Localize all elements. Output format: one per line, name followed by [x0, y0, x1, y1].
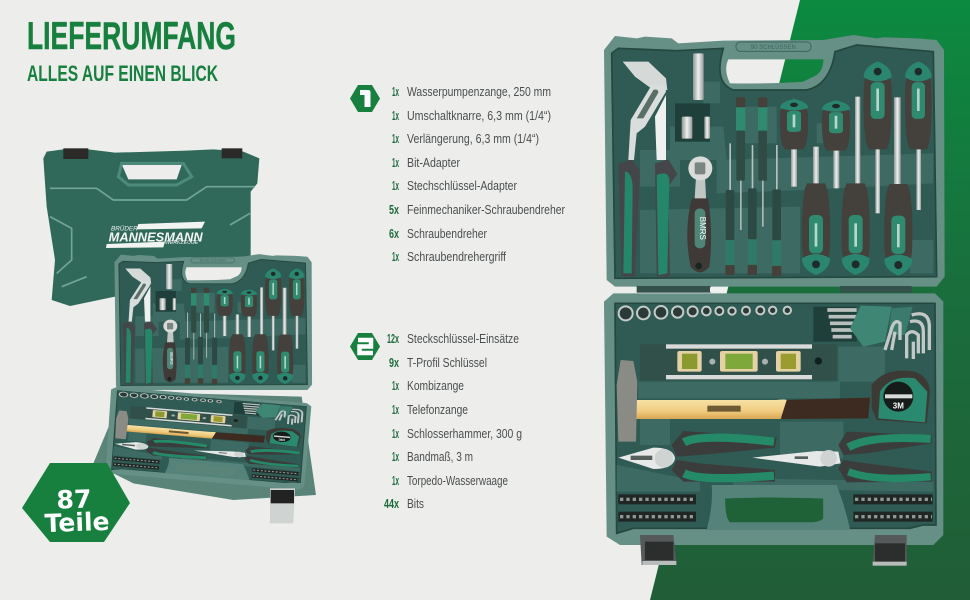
item row [392, 402, 468, 417]
item row: Steckschlüssel-Einsätze [407, 332, 519, 346]
item row: 1x [392, 131, 399, 146]
item row [392, 378, 464, 393]
item row [392, 473, 508, 488]
item row: Umschaltknarre, 6,3 mm (1/4“) [407, 109, 551, 123]
badge: 87 Teile [22, 463, 130, 542]
parts list 2 [350, 331, 522, 511]
parts list 1 [350, 84, 565, 264]
badge 1 [350, 85, 380, 112]
badge: 87 Teile: 87 [56, 484, 92, 515]
item row: Kombizange [407, 379, 464, 393]
item row: 12x [387, 331, 399, 346]
hammer [617, 360, 870, 442]
item row [387, 331, 519, 346]
label plate [736, 42, 811, 51]
adapters [682, 117, 710, 139]
item row [389, 355, 487, 370]
bit rows [618, 494, 933, 522]
item row [384, 496, 424, 511]
latches [640, 535, 907, 566]
raised blocks [640, 107, 933, 273]
logo [106, 222, 205, 248]
item row: T-Profil Schlüssel [407, 356, 487, 370]
ratchet: BMRS [698, 217, 707, 240]
badge: 87 Teile: Teile [44, 507, 110, 538]
item row: 9x [389, 355, 400, 370]
item row [392, 449, 473, 464]
precision screwdrivers [725, 97, 781, 276]
item row: 1x [392, 473, 399, 488]
extension bar [693, 53, 704, 100]
item row: Torpedo-Wasserwaage [407, 474, 508, 488]
badge 2 [350, 333, 380, 360]
logo: WERKZEUGE [165, 240, 199, 246]
item row [389, 226, 487, 241]
label plate: 90 SCHLÜSSEN [751, 44, 796, 51]
item row: Wasserpumpenzange, 250 mm [407, 85, 551, 99]
item row: 1x [392, 449, 399, 464]
lower tray [604, 293, 943, 566]
item row: 1x [392, 378, 399, 393]
item row: Schlosserhammer, 300 g [407, 427, 522, 441]
torpedo level [640, 344, 837, 380]
item row: Feinmechaniker-Schraubendreher [407, 203, 565, 217]
left kit: closed lid and open case [43, 148, 316, 523]
item row: 44x [384, 496, 400, 511]
item row: 1x [392, 84, 399, 99]
item row: 1x [392, 249, 399, 264]
raised blocks [617, 347, 933, 492]
long nose pliers [752, 432, 932, 482]
torx keys [813, 306, 929, 359]
subtitle: ALLES AUF EINEN BLICK [27, 61, 218, 86]
small upper tray [114, 254, 312, 390]
title: LIEFERUMFANG [27, 15, 236, 58]
item row: 1x [392, 155, 399, 170]
item row: Schraubendreher [407, 227, 487, 241]
item row: 1x [392, 108, 399, 123]
item row [392, 155, 460, 170]
item row: 1x [392, 426, 399, 441]
logo: BRÜDER [111, 224, 138, 232]
small lower tray [93, 387, 316, 523]
logo: MANNESMANN [109, 230, 204, 244]
item row: 6x [389, 226, 400, 241]
green background panel [650, 0, 970, 600]
water pump pliers [618, 62, 677, 277]
item row: Stechschlüssel-Adapter [407, 179, 517, 193]
item row: 5x [389, 202, 400, 217]
item row: Telefonzange [407, 403, 468, 417]
item row: Bits [407, 497, 424, 511]
ratchet [687, 156, 712, 272]
item row: 1x [392, 402, 399, 417]
item row: Bandmaß, 3 m [407, 450, 473, 464]
item row: Bit-Adapter [407, 156, 460, 170]
tape measure [872, 371, 930, 423]
upper tray [604, 35, 945, 287]
screwdrivers [780, 61, 932, 276]
sockets [619, 306, 791, 320]
tape measure: 3M [893, 401, 904, 410]
item row: Verlängerung, 6,3 mm (1/4“) [407, 132, 539, 146]
item row: Schraubendrehergriff [407, 250, 506, 264]
item row: 1x [392, 178, 399, 193]
closed lid [43, 148, 259, 306]
right kit: open case [604, 35, 945, 566]
hinges [637, 286, 912, 293]
combination pliers [618, 431, 777, 482]
